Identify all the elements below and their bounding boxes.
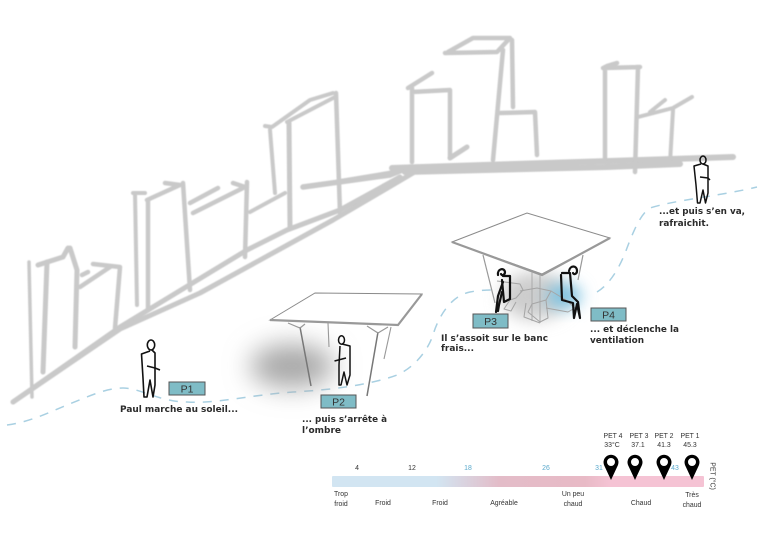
canopy	[270, 293, 422, 396]
comfort categories: chaud	[564, 501, 583, 508]
comfort categories: Agréable	[490, 500, 518, 507]
pin labels: 41.3	[657, 442, 671, 449]
gradient bar	[332, 476, 704, 487]
caption P2: ... puis s’arrête à	[302, 414, 387, 425]
caption P2: l’ombre	[302, 426, 341, 436]
figure leaving	[694, 156, 710, 203]
comfort categories: Froid	[432, 500, 448, 507]
comfort categories: Très	[685, 492, 699, 499]
ground shadow	[250, 344, 334, 388]
comfort categories: Froid	[375, 500, 391, 507]
comfort categories: chaud	[683, 502, 702, 509]
pin labels: PET 1	[680, 433, 700, 440]
comfort categories	[334, 491, 702, 509]
buildings	[29, 38, 692, 397]
caption P1: Paul marche au soleil...	[120, 405, 238, 415]
caption leaving: rafraichit.	[659, 219, 709, 229]
caption leaving	[659, 207, 745, 229]
pin labels: 45.3	[683, 442, 697, 449]
pin labels: PET 2	[654, 433, 674, 440]
threshold numbers	[355, 465, 679, 472]
pin labels: 37.1	[631, 442, 645, 449]
scene P2: shade under the canopy	[250, 293, 422, 436]
tag P4: P4	[602, 310, 615, 322]
caption P4	[590, 324, 679, 346]
bench shadow	[501, 272, 569, 320]
pin labels: 33°C	[604, 441, 620, 449]
tag P3	[473, 314, 508, 328]
pin labels: PET 3	[629, 433, 649, 440]
caption leaving: ...et puis s’en va,	[659, 207, 745, 217]
threshold numbers: 31	[595, 465, 603, 472]
comfort categories: froid	[334, 501, 348, 508]
threshold numbers: 26	[542, 465, 550, 472]
caption P4: ventilation	[590, 336, 644, 346]
caption P3: frais...	[441, 344, 474, 354]
scene: Paul leaves	[659, 156, 745, 229]
caption P4: ... et déclenche la	[590, 324, 679, 335]
figure P4 seated	[561, 266, 580, 318]
figure P1	[142, 340, 160, 397]
scene P3 and P4: cooled bench	[441, 213, 679, 354]
pin labels: PET 4	[603, 433, 623, 440]
comfort categories: Trop	[334, 491, 348, 498]
map pins	[604, 455, 700, 480]
caption P3	[441, 334, 548, 354]
ground lines of the city	[13, 147, 733, 402]
figure P3 seated	[496, 269, 510, 312]
ventilation glow	[547, 284, 581, 308]
tag P3: P3	[484, 316, 497, 328]
tag P2	[321, 395, 356, 408]
caption P3: Il s’assoit sur le banc	[441, 334, 548, 344]
threshold numbers: 43	[671, 465, 679, 472]
walking path dashed line	[7, 187, 757, 425]
axis label: PET (°C)	[708, 462, 716, 490]
comfort categories: Chaud	[631, 500, 651, 507]
tag P4	[591, 308, 626, 322]
PET scale chart	[332, 433, 716, 509]
bench	[497, 281, 575, 323]
threshold numbers: 12	[408, 465, 416, 472]
comfort categories: Un peu	[562, 491, 584, 498]
caption P2	[302, 414, 387, 436]
city skyline sketch	[13, 38, 733, 402]
tag P1: P1	[181, 384, 194, 396]
threshold numbers: 18	[464, 465, 472, 472]
pin labels	[603, 433, 700, 449]
scene P1: Paul in the sun	[120, 340, 238, 415]
threshold numbers: 4	[355, 465, 359, 472]
canopy	[452, 213, 610, 323]
figure P2	[334, 336, 350, 385]
tag P2: P2	[332, 396, 345, 408]
